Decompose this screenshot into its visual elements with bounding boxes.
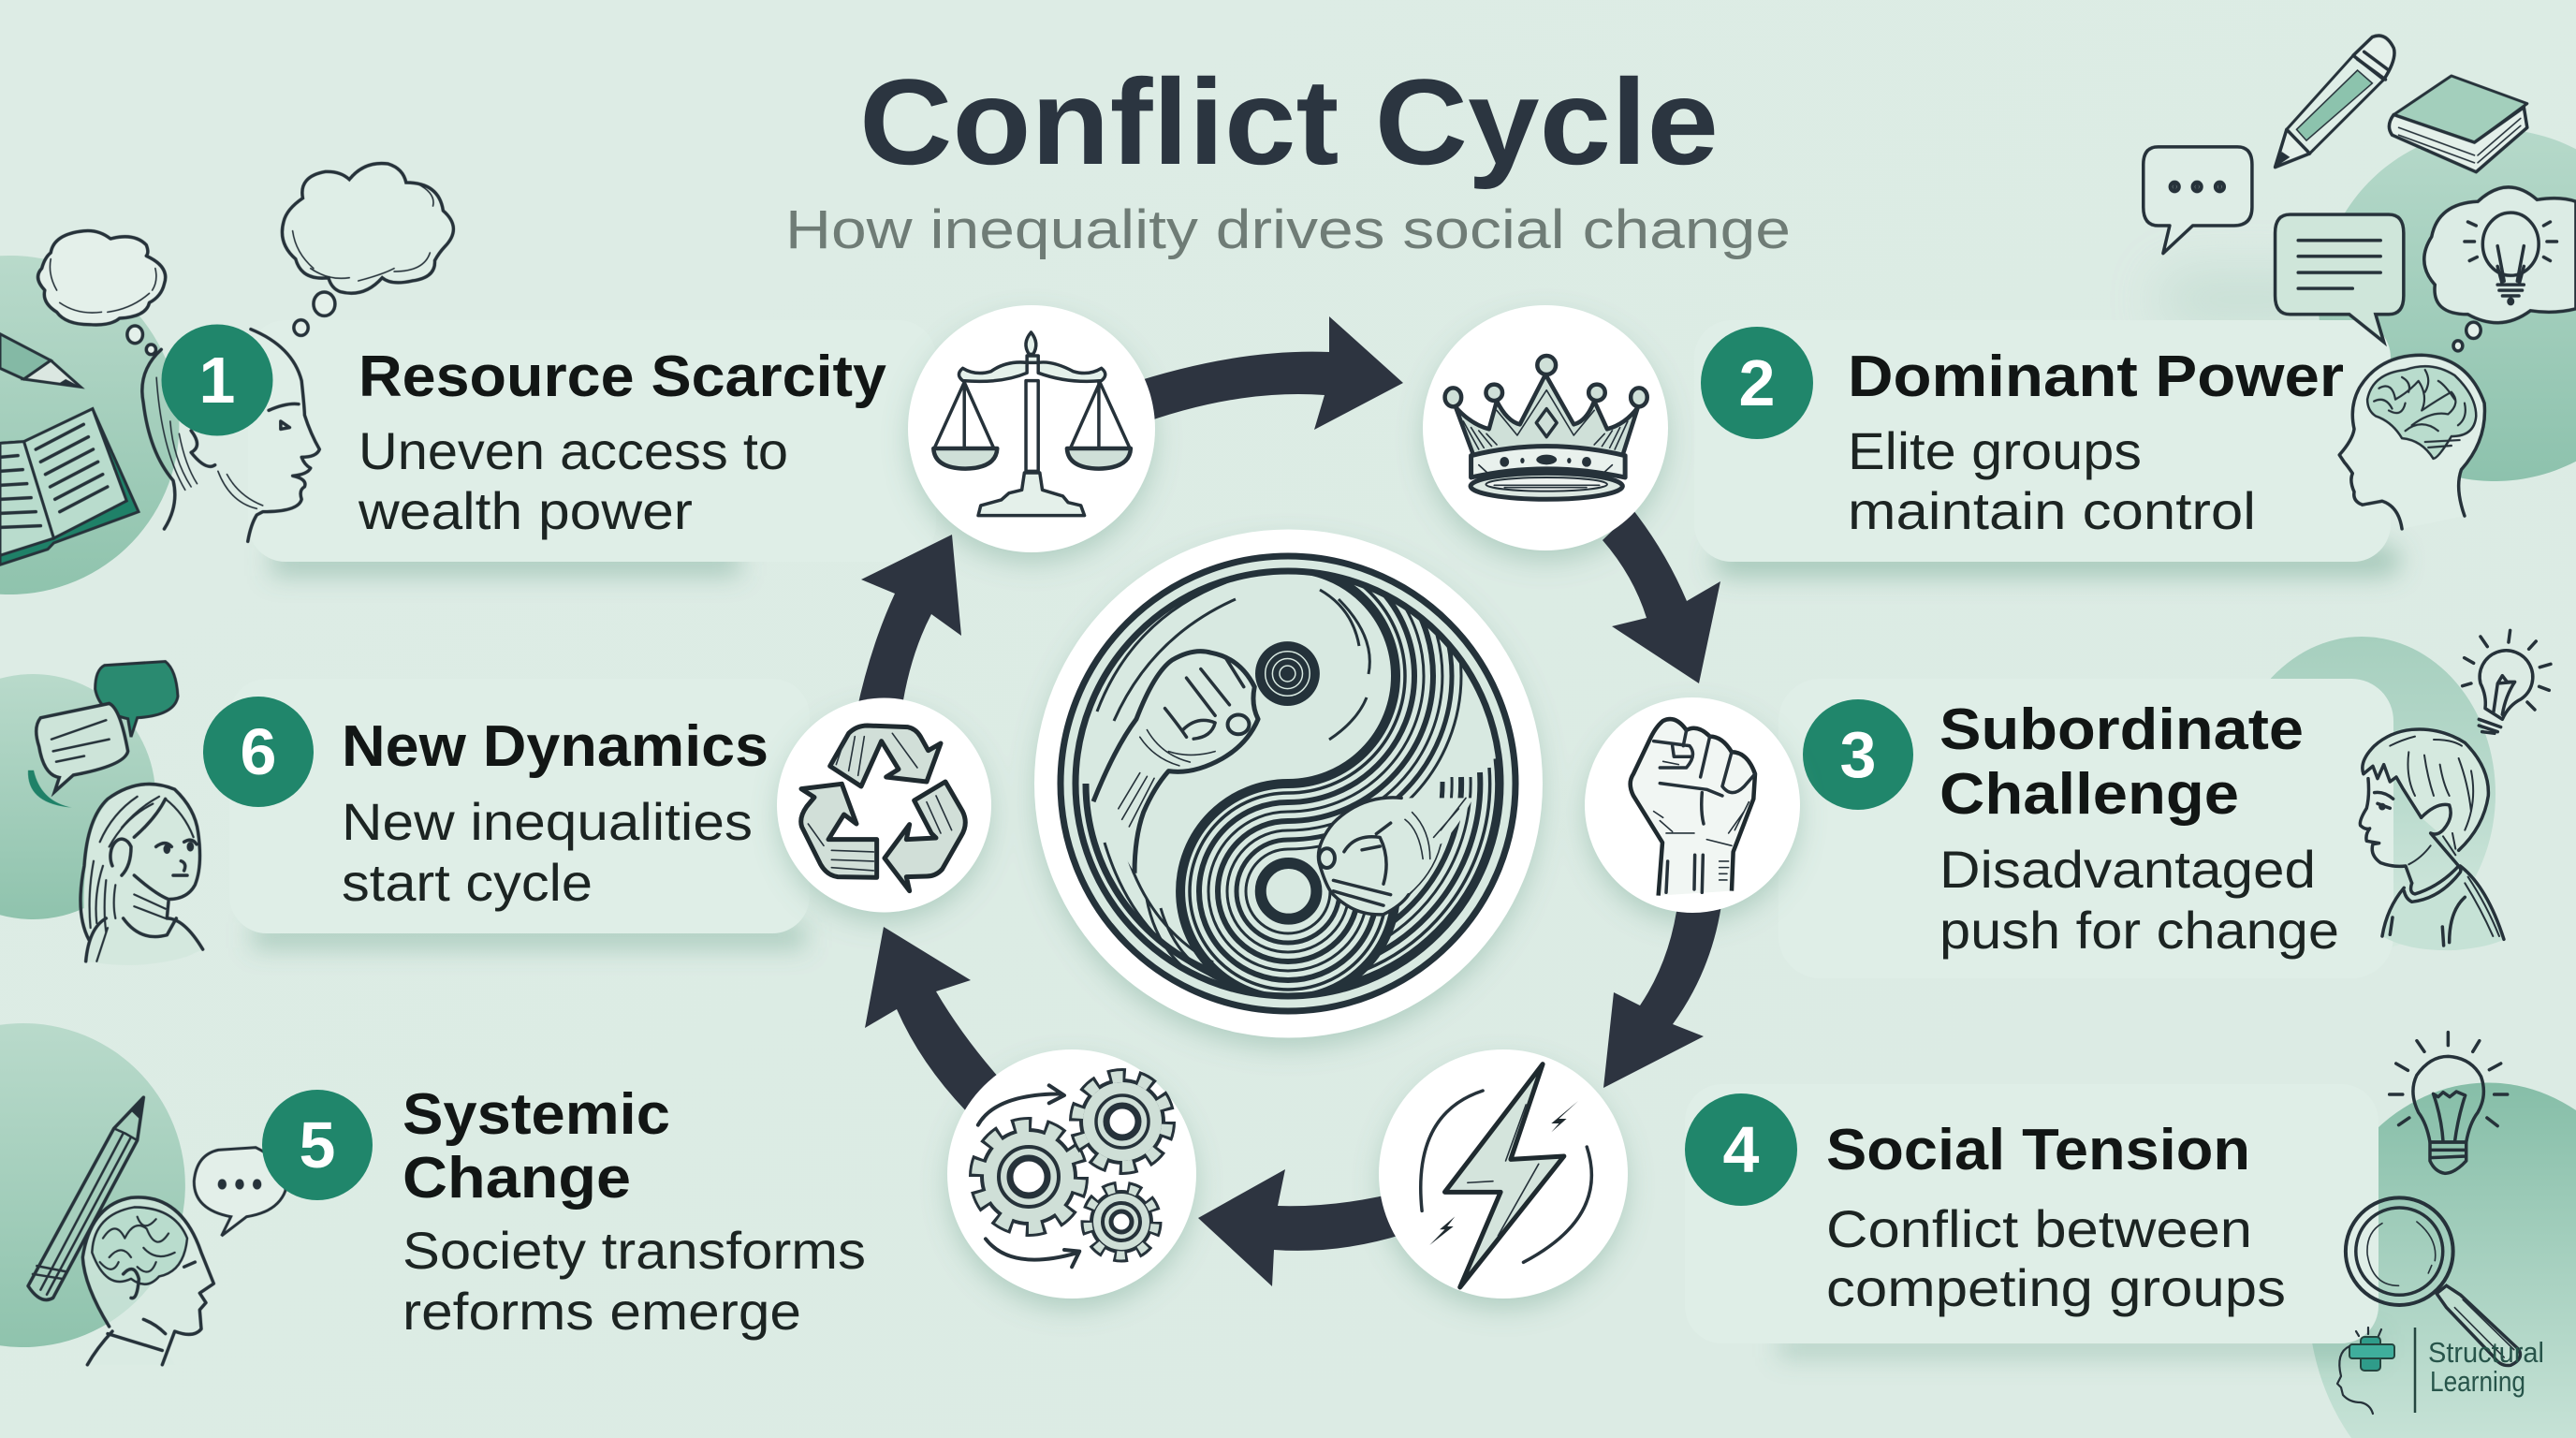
logo: structural learning [2337,1328,2544,1414]
badge 5 [262,1090,373,1200]
panel: step 4 social tension [1685,1084,2378,1343]
card soft shadows [253,545,2401,1358]
panel: step 5 systemic change [402,1082,866,1341]
badge 3 [1803,699,1913,810]
arrow: 1 to 2 [1123,316,1403,430]
heading: resource scarcity: Resource Scarcity [359,345,887,409]
panel: step 3 subordinate challenge [1778,679,2393,978]
text block: step 1 description: wealth power [358,481,693,540]
circle shadows [779,306,1799,1298]
illustration: boy profile with lightbulb [2360,630,2551,950]
arrow: 2 to 3 [1603,510,1720,683]
text block: step 2 description: Elite groups [1848,421,2142,480]
logo wordmark: Learning [2430,1365,2525,1398]
badge 2 [1701,327,1813,439]
text block: step 2 description: maintain control [1848,481,2256,540]
text block: step 6 description: start cycle [342,853,593,912]
panel: step 6 new dynamics [229,679,810,933]
logo wordmark: Structural [2428,1336,2544,1369]
nested s curves [1176,575,1462,992]
step number badges [161,324,1913,1206]
arrow: 4 to 5 [1198,1169,1404,1286]
soft shade above card 2 [2162,276,2331,323]
cover lower lobe [1288,914,1389,992]
arrow: 5 to 6 [865,927,1006,1119]
text block: step 3 description: push for change [1939,901,2339,960]
arrow: 6 to 1 [856,535,961,712]
illustration: top right pencil, book, speech bubbles, thought cloud and brain head [2144,36,2576,529]
badge 1: 1 [199,344,235,417]
heading: systemic change: Systemic [402,1082,670,1147]
icon: recycling arrows [777,698,991,912]
badge 6: 6 [241,715,276,788]
badge 4 [1685,1093,1797,1206]
central yin-yang with fists [1034,503,1543,1037]
illustration: bottom right lightbulb [2390,1033,2508,1173]
heading: dominant power: Dominant Power [1848,345,2344,409]
icon: gears [947,1049,1196,1299]
text block: step 6 description: New inequalities [342,792,753,851]
text block: step 5 description: Society transforms [402,1221,866,1280]
icon: crown [1423,305,1668,550]
heading: subordinate challenge: Challenge [1939,762,2239,827]
text block: step 4 description: Conflict between [1826,1199,2252,1258]
icon: magnifying glass [2346,1197,2520,1366]
text block: step 4 description: competing groups [1826,1258,2286,1317]
subtitle: How inequality drives social change [785,199,1791,260]
badge 6 [203,697,314,807]
dark eye [1255,641,1320,706]
gear top right [1077,1077,1167,1167]
icon: scales [908,305,1155,552]
icon: lightning bolt [1379,1049,1628,1299]
arrow: 3 to 4 [1603,899,1722,1088]
badge 5: 5 [300,1108,335,1181]
badge 1 [161,324,273,436]
gear large [978,1126,1079,1227]
arm and upper fist [1093,652,1258,873]
badge 3: 3 [1840,718,1876,791]
panel: step 1 resource scarcity [248,320,936,562]
illustration: girl with speech bubbles [28,662,285,1365]
light half hatching [1097,582,1369,994]
lower fist [1318,798,1473,915]
heading: social tension: Social Tension [1826,1118,2250,1182]
panel: step 2 dominant power [1694,320,2391,562]
heading: new dynamics: New Dynamics [342,714,768,779]
gear bottom right [1088,1188,1155,1255]
heading: subordinate challenge: Subordinate [1939,697,2304,762]
illustration: left top head, clouds, book, pencil [0,164,453,565]
icon: raised fist [1585,697,1800,913]
text block: step 3 description: Disadvantaged [1939,840,2316,899]
title: Conflict Cycle [859,53,1719,190]
text block: step 5 description: reforms emerge [402,1282,801,1341]
gear motion arrows [978,1085,1079,1267]
badge 2: 2 [1739,346,1775,419]
badge 4: 4 [1723,1113,1760,1186]
white eye [1261,863,1316,919]
heading: systemic change: Change [402,1146,631,1211]
text block: step 1 description: Uneven access to [359,421,788,480]
outer swirl lines of dark half [1354,758,1498,983]
